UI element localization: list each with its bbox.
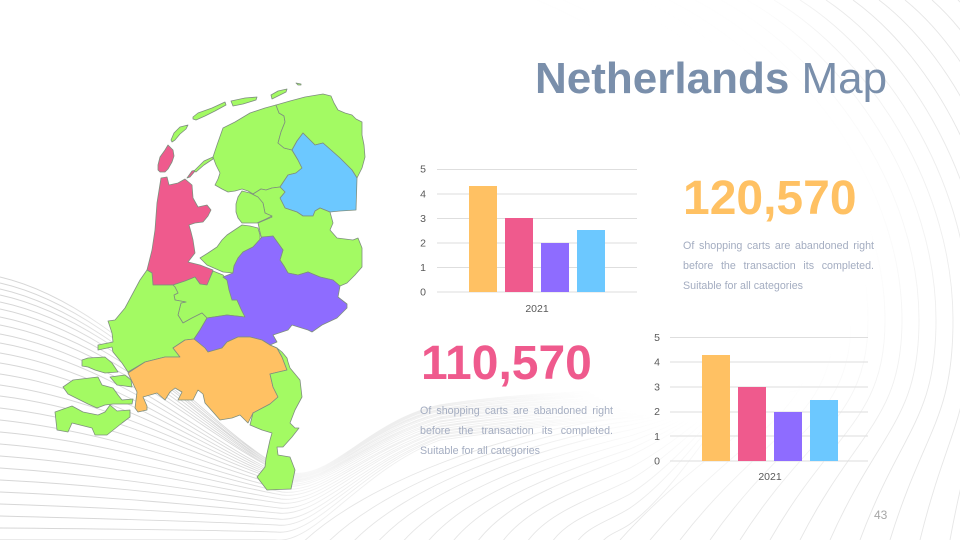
province: Flevoland — [200, 225, 260, 273]
Afsluitdijk — [194, 157, 213, 172]
text block: left: Of shopping carts are abandoned right — [420, 405, 613, 417]
page number: 43 — [874, 508, 887, 522]
text block: right: Of shopping carts are abandoned right — [683, 240, 874, 252]
axis labels: bottom chart — [654, 332, 782, 483]
province: Zuid-Holland — [98, 270, 207, 372]
axis labels: bottom chart: 0 — [654, 456, 660, 468]
axis labels: top chart: 4 — [420, 188, 426, 200]
axis labels: top chart: 1 — [420, 262, 426, 274]
stat: 110,570: 110,570 — [421, 337, 592, 390]
province: Limburg — [250, 345, 302, 490]
bars: top chart — [469, 186, 605, 292]
axis labels: bottom chart: 1 — [654, 431, 660, 443]
title: Netherlands Map — [535, 54, 887, 103]
axis labels: bottom chart: 2021 — [758, 471, 782, 483]
bars: bottom chart — [702, 355, 838, 461]
axis labels: top chart: 5 — [420, 164, 426, 176]
province: Noord-Brabant — [128, 337, 287, 423]
province: Noordoostpolder — [236, 191, 272, 223]
islands: Wadden — [171, 83, 301, 142]
text block: right: Suitable for all categories — [683, 280, 803, 292]
province: Utrecht — [173, 271, 245, 323]
province: Noord-Holland — [147, 145, 213, 285]
axis labels: top chart — [420, 164, 549, 315]
axis labels: bottom chart: 2 — [654, 406, 660, 418]
axis labels: bottom chart: 4 — [654, 356, 660, 368]
axis labels: top chart: 2021 — [525, 303, 549, 315]
text block: left: Suitable for all categories — [420, 445, 540, 457]
axis labels: top chart: 2 — [420, 238, 426, 250]
axis labels: top chart: 0 — [420, 286, 426, 298]
province: Friesland — [213, 105, 302, 194]
text block: left — [420, 405, 613, 457]
province: Groningen — [276, 94, 365, 178]
stat: 120,570: 120,570 — [683, 172, 857, 225]
axis labels: bottom chart: 3 — [654, 382, 660, 394]
axis labels: top chart: 3 — [420, 213, 426, 225]
axis labels: bottom chart: 5 — [654, 332, 660, 344]
province: Overijssel — [253, 187, 362, 286]
text block: right: before the transaction its completed. — [683, 260, 874, 272]
text block: left: before the transaction its completed. — [420, 425, 613, 437]
text block: right — [683, 240, 874, 292]
province: Zeeland — [55, 357, 133, 435]
province: Gelderland — [194, 236, 347, 352]
province: Drenthe — [280, 133, 357, 216]
